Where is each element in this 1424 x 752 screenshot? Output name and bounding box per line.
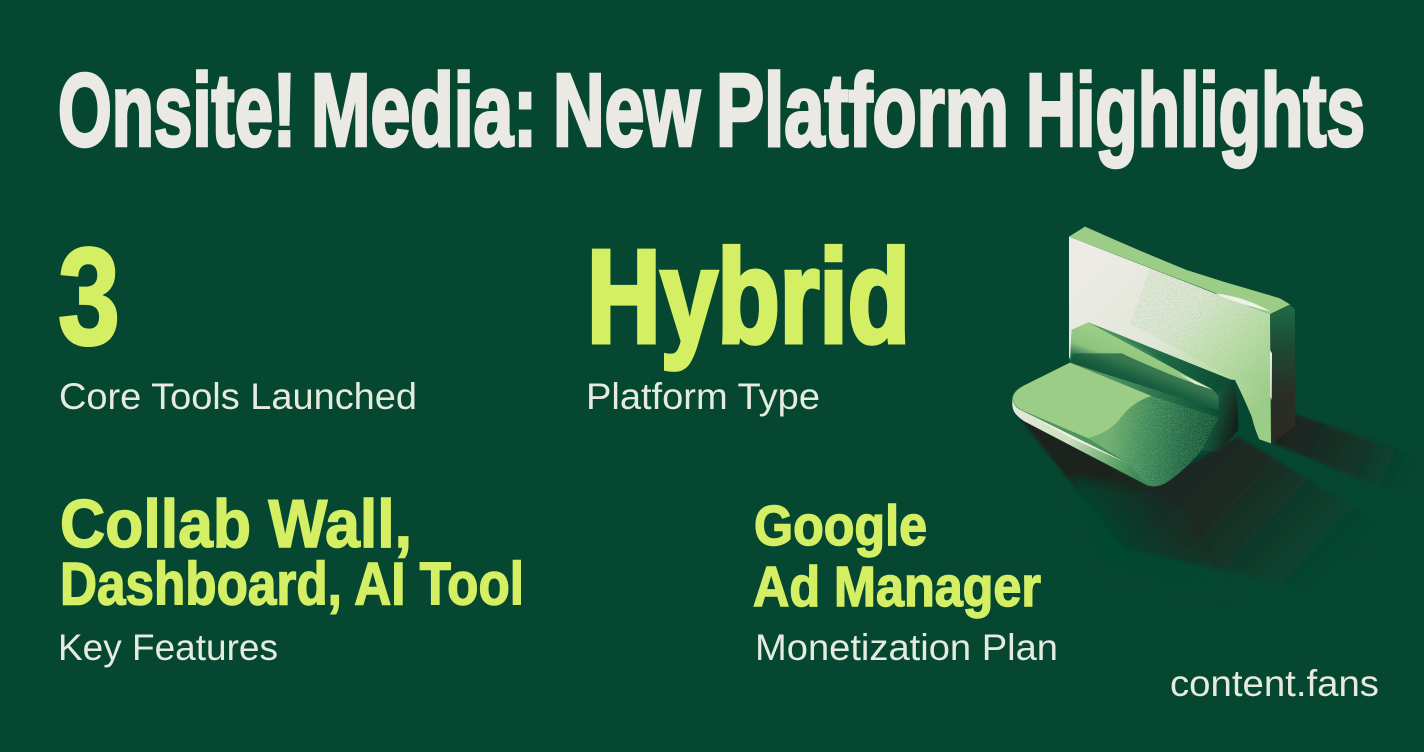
shelf end block: [1202, 379, 1238, 452]
wall top face: [1069, 227, 1290, 314]
wall and shadows: [1020, 227, 1424, 600]
ribbon shade: [1097, 326, 1232, 389]
stat: key features: [58, 486, 524, 668]
wall front face: [1069, 237, 1271, 443]
shelf lip front: [1012, 397, 1147, 485]
stat: monetization plan: [753, 494, 1058, 668]
stat value: google: Google: [754, 494, 927, 558]
title: [58, 52, 1365, 168]
stat: platform type: [586, 223, 910, 417]
stat value: dashboard, ai tool: Dashboard, AI Tool: [60, 550, 524, 618]
wall top highlight: [1216, 293, 1271, 312]
stat label: core tools launched: Core Tools Launched: [59, 376, 417, 417]
wall side face: [1270, 304, 1295, 443]
stat label: key features: Key Features: [58, 627, 278, 668]
title: New: [553, 52, 701, 168]
stat value: 3: 3: [58, 220, 120, 374]
seat grain: [1088, 396, 1218, 486]
shelf lit top: [1013, 363, 1152, 438]
stat value: ad manager: Ad Manager: [753, 555, 1041, 619]
shadows of shelf and wall: [1020, 414, 1424, 600]
wall edge highlight: [1270, 350, 1272, 400]
illustration: 3D wall and shelf: [1012, 227, 1424, 600]
title: Media:: [311, 52, 537, 168]
stat value: collab wall: Collab Wall,: [60, 486, 412, 562]
back cushion: [1070, 322, 1218, 410]
lip highlight: [1022, 411, 1128, 463]
seat shaded zone: [1088, 396, 1218, 486]
wall grain: [1130, 268, 1271, 397]
stat label: monetization plan: Monetization Plan: [755, 627, 1058, 668]
title: Platform: [716, 52, 1009, 168]
shelf body: [1012, 322, 1232, 486]
stat: core tools launched: [58, 220, 417, 417]
brand: content.fans: [1170, 663, 1379, 704]
ridge highlight: [1178, 373, 1212, 389]
cushion lower dark shade: [1070, 353, 1218, 410]
title: Onsite!: [58, 52, 296, 168]
stat label: platform type: Platform Type: [586, 376, 820, 417]
stat value: hybrid: Hybrid: [587, 223, 910, 370]
shelf: [1012, 322, 1238, 486]
